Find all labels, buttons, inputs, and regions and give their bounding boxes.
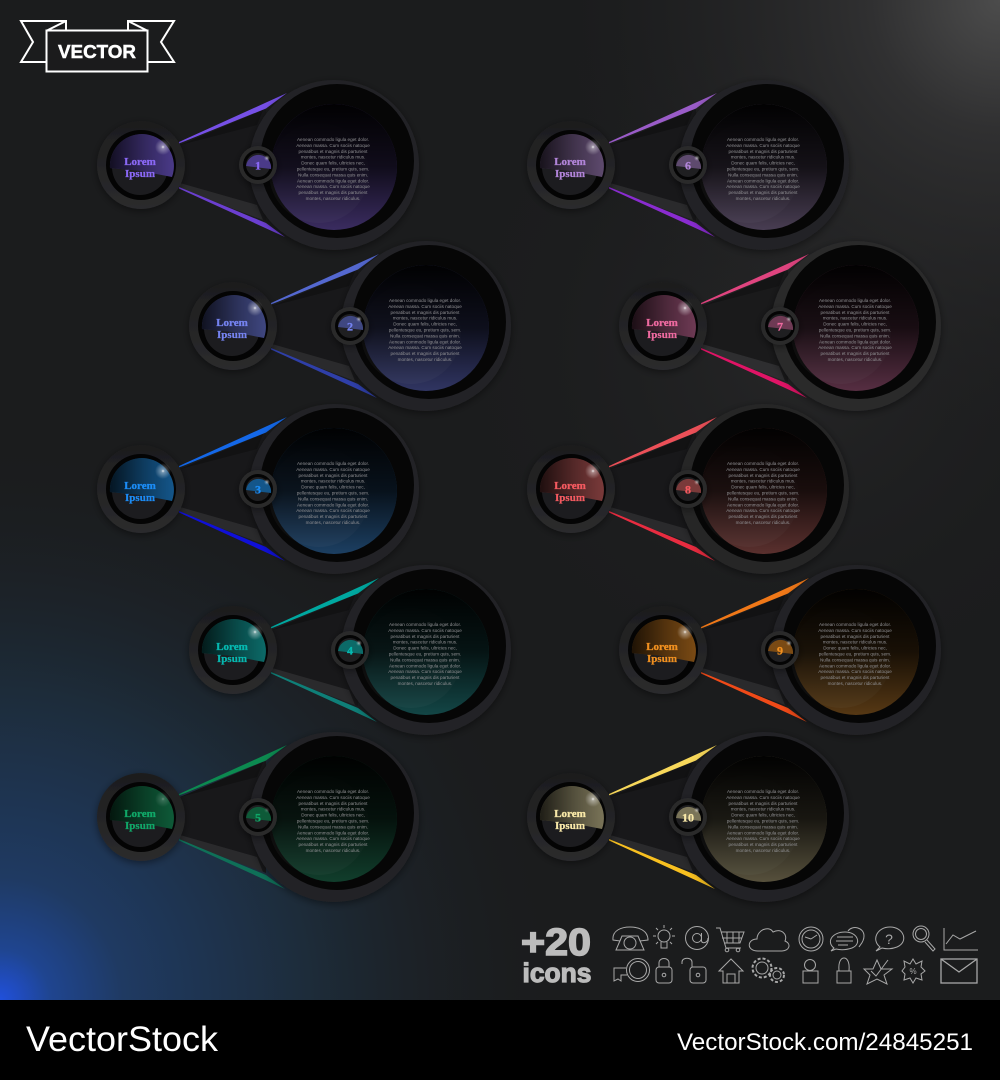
icon set xyxy=(613,925,978,984)
vector ribbon badge xyxy=(21,21,174,72)
icon: clock xyxy=(799,927,823,951)
unit 6: penatibus et magnis dis parturient xyxy=(729,149,798,154)
unit 5: Nulla consequat massa quis enim. xyxy=(298,824,368,829)
unit 5 xyxy=(97,732,419,902)
unit 8: 8 xyxy=(685,482,691,496)
unit 5: Aenean commodo ligula eget dolor. xyxy=(297,789,369,794)
unit 8: penatibus et magnis dis parturient xyxy=(729,514,798,519)
unit 7: Lorem xyxy=(646,317,678,329)
unit 6: montes, nascetur ridiculus. xyxy=(736,196,790,201)
unit 1: Lorem xyxy=(124,156,156,168)
unit 2: Aenean commodo ligula eget dolor. xyxy=(389,339,461,344)
icon: line chart xyxy=(944,928,978,950)
unit 7: Aenean massa. Cum sociis natoque xyxy=(818,304,892,309)
icon: question bubble: ? xyxy=(885,931,893,947)
unit 9: penatibus et magnis dis parturient xyxy=(821,634,890,639)
icon: cloud xyxy=(749,929,789,951)
icon: man xyxy=(803,960,818,983)
unit 9: montes, nascetur ridiculus mus. xyxy=(823,640,887,645)
unit 2: Donec quam felis, ultricies nec, xyxy=(393,322,457,327)
unit 3: pellentesque eu, pretium quis, sem. xyxy=(297,490,369,496)
unit 7: montes, nascetur ridiculus mus. xyxy=(823,316,887,321)
unit 10: penatibus et magnis dis parturient xyxy=(729,842,798,847)
unit 2: Aenean commodo ligula eget dolor. xyxy=(389,298,461,303)
unit 8 xyxy=(527,404,849,574)
unit 4 xyxy=(189,565,511,735)
unit 8: Aenean massa. Cum sociis natoque xyxy=(726,467,800,472)
unit 9 xyxy=(619,565,941,735)
unit 10: Lorem xyxy=(554,808,586,820)
unit 7: Aenean commodo ligula eget dolor. xyxy=(819,298,891,303)
unit 4: Aenean commodo ligula eget dolor. xyxy=(389,663,461,668)
unit 1: Aenean massa. Cum sociis natoque xyxy=(296,143,370,148)
unit 10: Aenean massa. Cum sociis natoque xyxy=(726,795,800,800)
unit 3: montes, nascetur ridiculus mus. xyxy=(301,479,365,484)
unit 6: pellentesque eu, pretium quis, sem. xyxy=(727,166,799,172)
unit 9: 9 xyxy=(777,644,783,658)
icon: telephone xyxy=(613,927,648,950)
unit 7: 7 xyxy=(777,320,783,334)
unit 2: Nulla consequat massa quis enim. xyxy=(390,333,460,338)
unit 9: montes, nascetur ridiculus. xyxy=(828,681,882,686)
unit 10: montes, nascetur ridiculus. xyxy=(736,848,790,853)
unit 1: Nulla consequat massa quis enim. xyxy=(298,172,368,177)
unit 5: Lorem xyxy=(124,808,156,820)
icon: open lock xyxy=(682,958,706,983)
unit 6: Lorem xyxy=(554,156,586,168)
unit 10: montes, nascetur ridiculus mus. xyxy=(731,807,795,812)
unit 5: penatibus et magnis dis parturient xyxy=(299,842,368,847)
unit 8: Aenean commodo ligula eget dolor. xyxy=(727,461,799,466)
footer bar xyxy=(0,1000,1000,1080)
unit 3: penatibus et magnis dis parturient xyxy=(299,514,368,519)
unit 3: penatibus et magnis dis parturient xyxy=(299,473,368,478)
unit 6: montes, nascetur ridiculus mus. xyxy=(731,155,795,160)
unit 2: Aenean massa. Cum sociis natoque xyxy=(388,304,462,309)
unit 9: Ipsum xyxy=(647,653,677,665)
unit 10: Aenean commodo ligula eget dolor. xyxy=(727,830,799,835)
unit 6: Aenean massa. Cum sociis natoque xyxy=(726,184,800,189)
unit 8: Ipsum xyxy=(555,492,585,504)
icon: gears xyxy=(752,958,784,982)
icon: star with check xyxy=(864,960,892,984)
unit 10: Aenean massa. Cum sociis natoque xyxy=(726,836,800,841)
unit 4: montes, nascetur ridiculus mus. xyxy=(393,640,457,645)
unit 9: Donec quam felis, ultricies nec, xyxy=(823,646,887,651)
unit 5: 5 xyxy=(255,810,261,824)
unit 9: Aenean commodo ligula eget dolor. xyxy=(819,622,891,627)
unit 8: Aenean commodo ligula eget dolor. xyxy=(727,502,799,507)
footer url: VectorStock.com/24845251 xyxy=(677,1029,973,1056)
unit 5: pellentesque eu, pretium quis, sem. xyxy=(297,818,369,824)
vector ribbon badge: VECTOR xyxy=(58,41,136,62)
unit 1: pellentesque eu, pretium quis, sem. xyxy=(297,166,369,172)
unit 3: Aenean massa. Cum sociis natoque xyxy=(296,508,370,513)
unit 9: Aenean massa. Cum sociis natoque xyxy=(818,628,892,633)
unit 9: Aenean commodo ligula eget dolor. xyxy=(819,663,891,668)
unit 1: penatibus et magnis dis parturient xyxy=(299,190,368,195)
unit 2: Aenean massa. Cum sociis natoque xyxy=(388,345,462,350)
icon: closed lock xyxy=(656,958,672,983)
unit 8: montes, nascetur ridiculus. xyxy=(736,520,790,525)
unit 6: Donec quam felis, ultricies nec, xyxy=(731,161,795,166)
unit 6: 6 xyxy=(685,158,691,172)
unit 2: Ipsum xyxy=(217,329,247,341)
unit 4: Aenean commodo ligula eget dolor. xyxy=(389,622,461,627)
unit 6: Aenean commodo ligula eget dolor. xyxy=(727,178,799,183)
unit 3 xyxy=(97,404,419,574)
unit 5: Ipsum xyxy=(125,820,155,832)
footer logo: VectorStock xyxy=(26,1019,218,1059)
unit 3: Donec quam felis, ultricies nec, xyxy=(301,485,365,490)
unit 5: Aenean massa. Cum sociis natoque xyxy=(296,836,370,841)
unit 7 xyxy=(619,241,941,411)
unit 2: Lorem xyxy=(216,317,248,329)
unit 7: Aenean commodo ligula eget dolor. xyxy=(819,339,891,344)
unit 10: Aenean commodo ligula eget dolor. xyxy=(727,789,799,794)
unit 7: Ipsum xyxy=(647,329,677,341)
unit 7: penatibus et magnis dis parturient xyxy=(821,310,890,315)
unit 6: Nulla consequat massa quis enim. xyxy=(728,172,798,177)
icon: shopping cart xyxy=(716,928,744,952)
unit 8: montes, nascetur ridiculus mus. xyxy=(731,479,795,484)
unit 8: penatibus et magnis dis parturient xyxy=(729,473,798,478)
unit 7: penatibus et magnis dis parturient xyxy=(821,351,890,356)
unit 9: Aenean massa. Cum sociis natoque xyxy=(818,669,892,674)
unit 4: Aenean massa. Cum sociis natoque xyxy=(388,628,462,633)
unit 2: penatibus et magnis dis parturient xyxy=(391,351,460,356)
unit 9: Nulla consequat massa quis enim. xyxy=(820,657,890,662)
unit 2 xyxy=(189,241,511,411)
unit 4: Aenean massa. Cum sociis natoque xyxy=(388,669,462,674)
unit 1: Donec quam felis, ultricies nec, xyxy=(301,161,365,166)
unit 3: Lorem xyxy=(124,480,156,492)
unit 3: Aenean commodo ligula eget dolor. xyxy=(297,461,369,466)
unit 4: Lorem xyxy=(216,641,248,653)
unit 10: Donec quam felis, ultricies nec, xyxy=(731,813,795,818)
unit 5: Aenean commodo ligula eget dolor. xyxy=(297,830,369,835)
unit 5: montes, nascetur ridiculus mus. xyxy=(301,807,365,812)
icon: envelope xyxy=(941,959,977,983)
unit 7: Nulla consequat massa quis enim. xyxy=(820,333,890,338)
unit 4: Ipsum xyxy=(217,653,247,665)
unit 4: penatibus et magnis dis parturient xyxy=(391,675,460,680)
unit 4: Nulla consequat massa quis enim. xyxy=(390,657,460,662)
unit 1: 1 xyxy=(255,158,261,172)
icon: question bubble xyxy=(876,927,904,951)
unit 10 xyxy=(527,732,849,902)
unit 6: Ipsum xyxy=(555,168,585,180)
unit 4: pellentesque eu, pretium quis, sem. xyxy=(389,652,461,656)
icon: percent badge: % xyxy=(909,967,917,976)
unit 7: Aenean massa. Cum sociis natoque xyxy=(818,345,892,350)
unit 3: Aenean massa. Cum sociis natoque xyxy=(296,467,370,472)
icon: magnifier xyxy=(913,926,935,951)
unit 1: Ipsum xyxy=(125,168,155,180)
plus 20 icons caption xyxy=(521,922,592,988)
unit 5: Donec quam felis, ultricies nec, xyxy=(301,813,365,818)
unit 9: pellentesque eu, pretium quis, sem. xyxy=(819,652,891,656)
unit 1: Aenean massa. Cum sociis natoque xyxy=(296,184,370,189)
icon: house xyxy=(719,959,743,983)
unit 8: Donec quam felis, ultricies nec, xyxy=(731,485,795,490)
unit 1: Aenean commodo ligula eget dolor. xyxy=(297,178,369,183)
unit 6: penatibus et magnis dis parturient xyxy=(729,190,798,195)
unit 10: pellentesque eu, pretium quis, sem. xyxy=(727,818,799,824)
icon: percent badge xyxy=(902,959,925,983)
unit 10: Ipsum xyxy=(555,820,585,832)
unit 4: montes, nascetur ridiculus. xyxy=(398,681,452,686)
unit 5: penatibus et magnis dis parturient xyxy=(299,801,368,806)
unit 1: penatibus et magnis dis parturient xyxy=(299,149,368,154)
unit 8: Lorem xyxy=(554,480,586,492)
unit 1 xyxy=(97,80,419,250)
unit 4: penatibus et magnis dis parturient xyxy=(391,634,460,639)
unit 6: Aenean commodo ligula eget dolor. xyxy=(727,137,799,142)
unit 6: Aenean massa. Cum sociis natoque xyxy=(726,143,800,148)
unit 4: 4 xyxy=(347,644,353,658)
unit 7: Donec quam felis, ultricies nec, xyxy=(823,322,887,327)
unit 10: penatibus et magnis dis parturient xyxy=(729,801,798,806)
unit 2: penatibus et magnis dis parturient xyxy=(391,310,460,315)
unit 2: pellentesque eu, pretium quis, sem. xyxy=(389,328,461,332)
plus 20 icons caption: +20 xyxy=(521,922,591,964)
unit 3: Nulla consequat massa quis enim. xyxy=(298,496,368,501)
unit 5: Aenean massa. Cum sociis natoque xyxy=(296,795,370,800)
unit 10: 10 xyxy=(682,810,694,824)
unit 3: 3 xyxy=(255,482,261,496)
unit 10: Nulla consequat massa quis enim. xyxy=(728,824,798,829)
icon: chat bubbles xyxy=(830,928,864,951)
unit 2: 2 xyxy=(347,320,353,334)
unit 2: montes, nascetur ridiculus. xyxy=(398,357,452,362)
unit 1: montes, nascetur ridiculus mus. xyxy=(301,155,365,160)
unit 9: penatibus et magnis dis parturient xyxy=(821,675,890,680)
unit 7: montes, nascetur ridiculus. xyxy=(828,357,882,362)
unit 3: Ipsum xyxy=(125,492,155,504)
unit 1: Aenean commodo ligula eget dolor. xyxy=(297,137,369,142)
plus 20 icons caption: icons xyxy=(522,958,592,988)
icon: at sign xyxy=(686,926,708,950)
unit 2: montes, nascetur ridiculus mus. xyxy=(393,316,457,321)
unit 5: montes, nascetur ridiculus. xyxy=(306,848,360,853)
unit 4: Donec quam felis, ultricies nec, xyxy=(393,646,457,651)
unit 9: Lorem xyxy=(646,641,678,653)
unit 8: Aenean massa. Cum sociis natoque xyxy=(726,508,800,513)
icon: key and ring xyxy=(614,958,650,982)
unit 3: montes, nascetur ridiculus. xyxy=(306,520,360,525)
unit 7: pellentesque eu, pretium quis, sem. xyxy=(819,328,891,332)
unit 8: pellentesque eu, pretium quis, sem. xyxy=(727,490,799,496)
unit 8: Nulla consequat massa quis enim. xyxy=(728,496,798,501)
icon: woman xyxy=(837,958,851,983)
unit 1: montes, nascetur ridiculus. xyxy=(306,196,360,201)
unit 3: Aenean commodo ligula eget dolor. xyxy=(297,502,369,507)
unit 6 xyxy=(527,80,849,250)
icon: light bulb xyxy=(653,925,675,948)
